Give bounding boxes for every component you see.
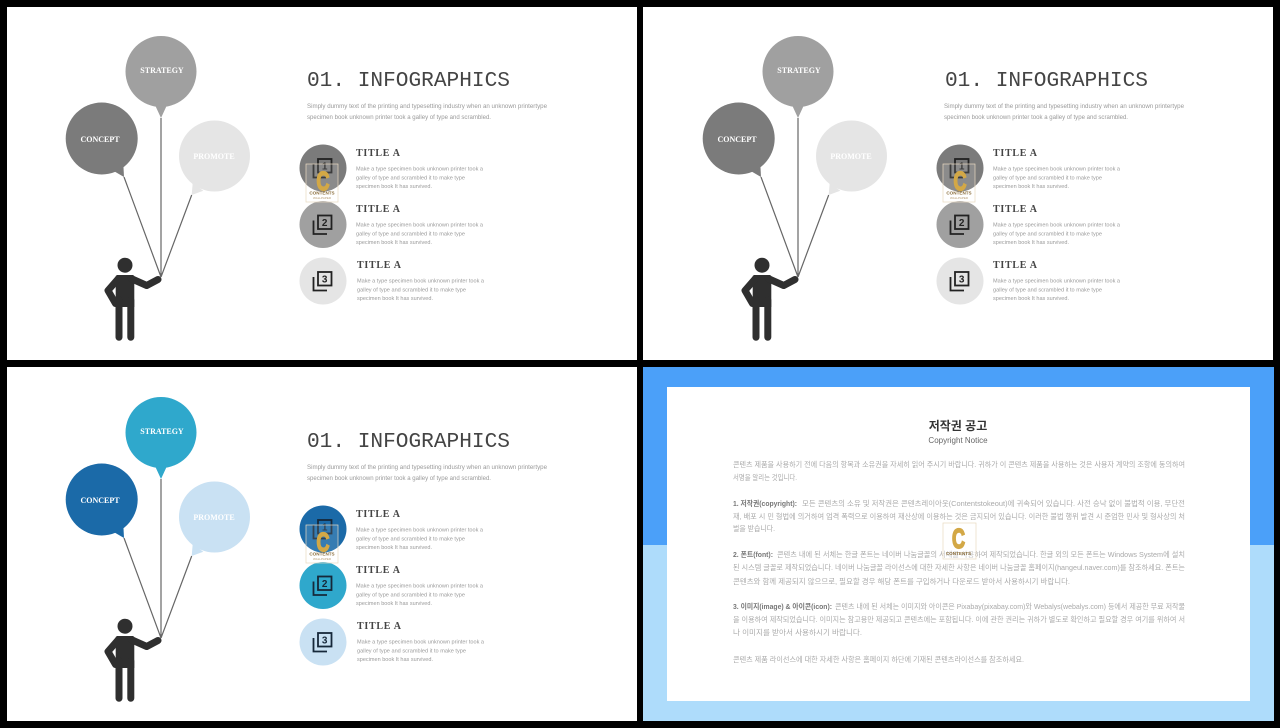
icon: number 3: 3 bbox=[959, 274, 965, 286]
description: Simply dummy text of the printing and typesetting industry when an unknown printertype bbox=[944, 103, 1184, 110]
item 2 bbox=[300, 201, 484, 248]
item 3: TITLE A bbox=[993, 260, 1038, 271]
icon: number 1 bbox=[950, 159, 968, 178]
item 1: Make a type specimen book unknown printer took a bbox=[993, 166, 1121, 172]
item 2 bbox=[936, 201, 1121, 248]
icon: person holding balloons bbox=[108, 619, 158, 698]
item 3: Make a type specimen book unknown printer took a bbox=[357, 640, 485, 646]
closing line: 콘텐츠 제품 라이선스에 대한 자세한 사항은 홈페이지 하단에 기재된 콘텐츠라이선스를 참조하세요. bbox=[733, 655, 1024, 664]
icon: number 2: 2 bbox=[322, 579, 328, 590]
watermark: WALLPAPER bbox=[313, 196, 332, 200]
item 2: galley of type and scrambled it to make type bbox=[356, 232, 465, 238]
item 1: Make a type specimen book unknown printer took a bbox=[356, 528, 484, 534]
balloon: strategy bbox=[762, 36, 834, 118]
watermark bbox=[943, 523, 976, 559]
watermark: CONTENTS bbox=[309, 552, 335, 556]
heading: copyright notice: Copyright Notice bbox=[928, 436, 988, 445]
item 1: specimen book It has survived. bbox=[993, 184, 1069, 190]
icon: number 2: 2 bbox=[322, 218, 328, 229]
balloon: strategy: STRATEGY bbox=[140, 427, 184, 436]
item 3: galley of type and scrambled it to make type bbox=[357, 288, 466, 294]
description: specimen book unknown printer took a galley of type and scrambled. bbox=[944, 114, 1128, 121]
item 3: galley of type and scrambled it to make type bbox=[993, 288, 1102, 294]
paragraph: image and icon: 콘텐츠 내에 된 서체는 이미지와 아이콘은 Pixabay(pixabay.com)와 Webalys(webalys.com) 등에서 제공한 무료 저작물 bbox=[835, 602, 1185, 611]
balloon: concept: CONCEPT bbox=[717, 135, 757, 144]
icon: number 1 bbox=[314, 159, 332, 178]
item 1: specimen book It has survived. bbox=[356, 545, 432, 551]
item 2: TITLE A bbox=[356, 565, 401, 576]
paragraph: copyright bbox=[733, 499, 1185, 533]
description bbox=[944, 103, 1184, 121]
item 1: TITLE A bbox=[356, 148, 401, 159]
watermark: WALLPAPER bbox=[950, 196, 969, 200]
icon: number 3: 3 bbox=[322, 636, 328, 646]
description: specimen book unknown printer took a galley of type and scrambled. bbox=[307, 114, 491, 121]
description bbox=[307, 464, 547, 482]
balloon: concept bbox=[66, 464, 138, 538]
panel: copyright notice bbox=[643, 367, 1274, 721]
item 1: TITLE A bbox=[993, 148, 1038, 159]
item 2: Make a type specimen book unknown printer took a bbox=[356, 222, 484, 228]
item 1: galley of type and scrambled it to make type bbox=[993, 176, 1102, 182]
watermark bbox=[306, 525, 338, 563]
intro paragraph: 콘텐츠 제품을 사용하기 전에 다음의 항목과 소유권을 자세히 읽어 주시기 바랍니다. 귀하가 이 콘텐츠 제품을 사용하는 것은 사용자 계약의 조항에 동의하여 bbox=[733, 460, 1185, 469]
item 3: specimen book It has survived. bbox=[993, 296, 1069, 302]
paragraph: font: 콘텐츠와 함께 제공되지 않으므로, 필요할 경우 해당 폰트를 구입하거나 다운로드 받아서 사용하시기 바랍니다. bbox=[733, 577, 1070, 586]
balloon: concept: CONCEPT bbox=[80, 135, 120, 144]
description bbox=[307, 103, 547, 121]
item 2: Make a type specimen book unknown printer took a bbox=[356, 584, 484, 590]
item 3: specimen book It has survived. bbox=[357, 296, 433, 302]
balloon: promote bbox=[816, 120, 887, 195]
balloon: strategy: STRATEGY bbox=[777, 66, 821, 75]
item 3 bbox=[936, 258, 1121, 304]
watermark: CONTENTS bbox=[946, 551, 971, 556]
item 1: galley of type and scrambled it to make type bbox=[356, 536, 465, 542]
item 2: TITLE A bbox=[993, 204, 1038, 215]
description: specimen book unknown printer took a galley of type and scrambled. bbox=[307, 475, 491, 482]
paragraph: image and icon: 을 이용하여 제작되었습니다. 이미지는 참고용만 제공되고 콘텐츠에는 포함됩니다. 이에 관한 권리는 귀하가 별도로 확인하고 필요할 경우 여기를 위하여 서 bbox=[733, 615, 1185, 624]
balloon: promote: PROMOTE bbox=[193, 152, 235, 161]
item 2: Make a type specimen book unknown printer took a bbox=[993, 222, 1121, 228]
watermark: WALLPAPER bbox=[313, 557, 332, 561]
item 2: specimen book It has survived. bbox=[356, 601, 432, 607]
watermark: C bbox=[954, 167, 966, 196]
watermark: C bbox=[317, 528, 329, 557]
icon: number 3 bbox=[314, 633, 332, 652]
paragraph: copyright: 벌을 받습니다. bbox=[733, 524, 775, 533]
item 3 bbox=[300, 618, 485, 666]
heading: 01. INFOGRAPHICS bbox=[945, 70, 1148, 93]
item 1: TITLE A bbox=[356, 509, 401, 520]
paragraph: image and icon: 나 이미지를 받아서 사용하시기 바랍니다. bbox=[733, 628, 862, 637]
balloon strings bbox=[124, 118, 192, 277]
item 1: galley of type and scrambled it to make type bbox=[356, 176, 465, 182]
paragraph: copyright: 1. 저작권(copyright): bbox=[733, 499, 797, 508]
item 2: galley of type and scrambled it to make type bbox=[356, 592, 465, 598]
panel: grey infographic slide bbox=[7, 7, 637, 360]
icon: number 1: 1 bbox=[959, 162, 965, 172]
paragraph: copyright: 모든 콘텐츠의 소유 및 저작권은 콘텐츠레이아웃(Contentstokeout)에 귀속되어 있습니다. 사전 승낙 없이 불법적 이용, 무단전 bbox=[802, 499, 1185, 508]
watermark bbox=[943, 164, 975, 202]
balloon: concept bbox=[703, 102, 775, 177]
item 3: Make a type specimen book unknown printer took a bbox=[993, 278, 1121, 284]
heading: copyright notice bbox=[928, 418, 988, 445]
heading: copyright notice: 저작권 공고 bbox=[929, 418, 987, 433]
paragraph: font: 2. 폰트(font): bbox=[733, 550, 773, 559]
icon: number 3: 3 bbox=[322, 274, 328, 286]
heading: 01. INFOGRAPHICS bbox=[307, 70, 510, 93]
panel: dark grey infographic slide bbox=[643, 7, 1273, 360]
balloon: strategy bbox=[126, 397, 196, 479]
item 3: TITLE A bbox=[357, 260, 402, 271]
paragraph: font: 콘텐츠 내에 된 서체는 한글 폰트는 네이버 나눔글꼴의 서체를 사용하여 제작되었습니다. 한글 외의 모든 폰트는 Windows System에 설치 bbox=[777, 550, 1185, 559]
icon: number 1 bbox=[314, 520, 332, 538]
item 2: TITLE A bbox=[356, 204, 401, 215]
item 3 bbox=[300, 258, 485, 304]
watermark: C bbox=[317, 167, 329, 196]
paragraph: image and icon bbox=[733, 602, 1185, 637]
balloon: promote bbox=[179, 482, 250, 556]
icon: number 2: 2 bbox=[959, 218, 965, 229]
watermark: CONTENTS bbox=[946, 190, 972, 196]
watermark: CONTENTS bbox=[309, 190, 335, 196]
icon: person holding balloons bbox=[745, 258, 795, 337]
item 3: galley of type and scrambled it to make type bbox=[357, 648, 466, 654]
balloon: promote: PROMOTE bbox=[193, 513, 235, 522]
balloon: strategy: STRATEGY bbox=[140, 66, 184, 75]
paragraph: image and icon: 3. 이미지(image) & 아이콘(icon): bbox=[733, 602, 832, 611]
item 3: specimen book It has survived. bbox=[357, 657, 433, 663]
watermark: C bbox=[952, 523, 965, 554]
item 2 bbox=[300, 562, 484, 609]
balloon: promote bbox=[179, 120, 250, 195]
item 2: galley of type and scrambled it to make type bbox=[993, 232, 1102, 238]
item 1: Make a type specimen book unknown printer took a bbox=[356, 166, 484, 172]
icon: number 1: 1 bbox=[322, 522, 328, 534]
icon: number 2 bbox=[950, 216, 968, 234]
balloon strings bbox=[761, 118, 829, 277]
intro paragraph bbox=[733, 460, 1185, 482]
watermark bbox=[306, 164, 338, 202]
icon: number 3 bbox=[314, 272, 332, 290]
balloon: concept bbox=[66, 102, 138, 177]
item 1 bbox=[300, 506, 484, 552]
icon: person holding balloons bbox=[108, 258, 158, 337]
intro paragraph: 서명을 알리는 것입니다. bbox=[733, 473, 797, 482]
icon: number 2 bbox=[314, 576, 332, 595]
item 3: Make a type specimen book unknown printer took a bbox=[357, 278, 485, 284]
balloon: concept: CONCEPT bbox=[80, 496, 120, 505]
description: Simply dummy text of the printing and typesetting industry when an unknown printertype bbox=[307, 103, 547, 110]
balloon strings bbox=[124, 479, 192, 638]
item 1 bbox=[300, 144, 484, 192]
icon: number 1: 1 bbox=[322, 162, 328, 172]
item 1: specimen book It has survived. bbox=[356, 184, 432, 190]
balloon: promote: PROMOTE bbox=[830, 152, 872, 161]
paragraph: font bbox=[733, 550, 1185, 586]
item 1 bbox=[936, 144, 1121, 192]
heading: 01. INFOGRAPHICS bbox=[307, 431, 510, 454]
icon: number 3 bbox=[950, 272, 968, 290]
icon: number 2 bbox=[314, 216, 332, 234]
paragraph: font: 된 시스템 글꼴로 제작되었습니다. 네이버 나눔글꼴 라이선스에 대한 자세한 사항은 네이버 나눔글꼴 홈페이지(hangeul.naver.com)를 참조하세요. 폰트는 bbox=[733, 563, 1185, 572]
item 2: specimen book It has survived. bbox=[356, 240, 432, 246]
item 3: TITLE A bbox=[357, 621, 402, 632]
paragraph: copyright: 재, 배포 시 민 형법에 의거하여 엄격 폭력으로 이용하여 재산상에 이용하는 것은 금지되어 있습니다. 이러한 불법 행위 발견 시 준엄한 민사 및 형사상의 처 bbox=[733, 512, 1185, 521]
description: Simply dummy text of the printing and typesetting industry when an unknown printertype bbox=[307, 464, 547, 471]
item 2: specimen book It has survived. bbox=[993, 240, 1069, 246]
balloon: strategy bbox=[126, 36, 196, 118]
panel: blue infographic slide bbox=[7, 367, 637, 721]
